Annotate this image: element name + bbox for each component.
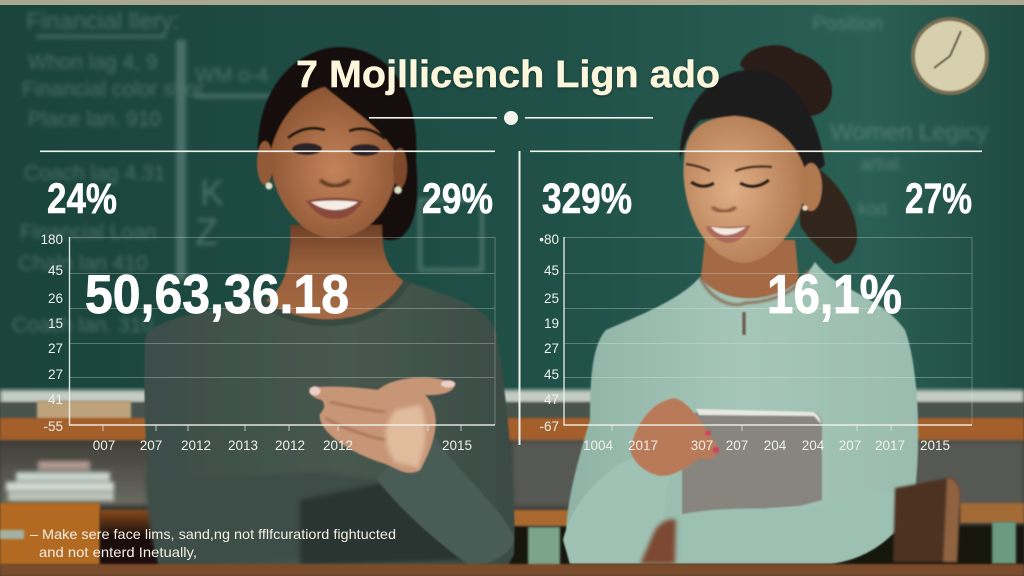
x axis labels left: 007: [93, 438, 115, 453]
blurred chalk writing: K: [200, 172, 224, 213]
ponytail: [800, 160, 857, 264]
big value left: 50,63,36.18: [85, 263, 349, 325]
nose: [712, 207, 736, 212]
x axis labels right: [583, 438, 950, 453]
ear left: [257, 141, 273, 185]
wall clock: [911, 17, 989, 95]
smile: [306, 198, 363, 219]
face: [683, 116, 806, 263]
top wall strip: [0, 0, 1024, 5]
footnote: – Make sere face lims, sand,ng not fflfcuratiord fightucted: [30, 526, 396, 542]
ledge shadow: [0, 403, 1024, 419]
y axis labels left: -55: [43, 419, 63, 434]
lower sleeve: [675, 491, 915, 564]
stat: 29%: 29%: [422, 175, 493, 223]
books far right: [992, 522, 1016, 564]
nose: [320, 180, 350, 186]
sleeve: [376, 430, 514, 566]
footnote: and not enterd Inetually,: [39, 544, 197, 560]
smile: [705, 225, 751, 243]
orange cabinet: [0, 503, 100, 565]
title: 7 Mojllicench Lign ado: [296, 54, 720, 96]
sweater: [566, 262, 918, 564]
blurred chalk writing: Financial Loan: [20, 221, 157, 244]
lower hand: [640, 519, 676, 564]
dark cabinet: [100, 510, 160, 566]
x axis labels left: 2013: [228, 438, 258, 453]
stat: 27%: 27%: [905, 175, 972, 223]
y axis labels right: -67: [539, 419, 559, 434]
blurred chalk writing: [12, 8, 988, 337]
eye left: [292, 143, 322, 155]
blurred chalk writing: Chaln lan 410: [18, 252, 148, 275]
blurred chalk writing: Coach lag 4.31: [24, 162, 165, 185]
desk edge: [0, 564, 1024, 576]
hands: [310, 378, 455, 473]
right shelf: [510, 526, 1024, 566]
eye left: [691, 182, 714, 186]
earrings: [266, 182, 402, 194]
button placket: [742, 312, 746, 335]
wooden shelf: [0, 418, 1024, 441]
section rules: [40, 150, 982, 445]
x axis labels right: 204: [764, 438, 787, 453]
x axis labels right: 207: [726, 438, 748, 453]
x axis labels left: 207: [140, 438, 162, 453]
blurred chalk writing: Financial color shor: [22, 78, 204, 101]
hair: [680, 70, 825, 175]
y axis labels left: 27: [48, 367, 63, 382]
y axis labels left: 41: [48, 392, 63, 407]
y axis labels right: 45: [544, 367, 559, 382]
fingernails: [310, 380, 455, 396]
dark gap: [300, 480, 470, 566]
y axis labels left: 27: [48, 341, 63, 356]
x axis labels right: 207: [839, 438, 861, 453]
lower wall right: [512, 441, 1024, 507]
panel: right stats and chart: [539, 175, 972, 453]
ear right: [393, 148, 407, 188]
big value right: 16,1%: [767, 263, 902, 325]
x axis labels left: 2012: [181, 438, 211, 453]
blurred chalk writing: Financial llery:: [26, 8, 179, 35]
left person: [144, 47, 515, 568]
y axis labels right: [539, 232, 559, 434]
right person: [563, 45, 960, 564]
earring: [802, 206, 808, 210]
panel: left stats and chart: [40, 175, 495, 453]
hair bun: [740, 45, 832, 116]
stacked books: [6, 461, 114, 501]
x axis labels left: 2015: [442, 438, 472, 453]
blurred chalk writing: Position: [812, 13, 883, 35]
front arm: [145, 470, 395, 566]
tablet: [682, 409, 822, 514]
y axis labels right: 19: [544, 316, 559, 331]
y axis labels left: 26: [48, 291, 63, 306]
title divider: [369, 111, 653, 125]
y axis labels left: [40, 232, 63, 434]
y axis labels right: 25: [544, 291, 559, 306]
chalk tray: [0, 390, 1024, 403]
x axis labels left: 2012: [275, 438, 305, 453]
blurred chalk writing: Place lan. 910: [28, 108, 161, 131]
hair back: [258, 47, 417, 240]
neck: [262, 225, 408, 320]
hand: [630, 398, 717, 476]
line chart frame left: [70, 237, 495, 431]
tray block: [37, 401, 131, 420]
x axis labels right: 307: [691, 438, 713, 453]
forearm: [563, 453, 670, 564]
x axis labels left: [93, 438, 472, 453]
blurred chalk writing: artial.: [860, 154, 904, 174]
footnote: [30, 526, 396, 560]
y axis labels right: 45: [544, 263, 559, 278]
sweater: [144, 281, 515, 568]
x axis labels right: 2017: [875, 438, 905, 453]
neck: [700, 240, 800, 305]
fingernails: [705, 430, 720, 454]
blurred chalk writing: Whon lag 4, 9: [28, 51, 158, 74]
right shelf top: [510, 510, 570, 526]
line chart frame right: [564, 237, 972, 431]
books right: [528, 527, 560, 566]
blurred chalk writing: WM o-4: [195, 64, 269, 87]
x axis labels right: 2015: [920, 438, 950, 453]
blurred chalk writing: Coach lan. 310: [12, 314, 153, 337]
lower wall left: [0, 441, 512, 505]
stat: 329%: 329%: [542, 175, 632, 223]
x axis labels right: 2017: [628, 438, 658, 453]
chair: [893, 478, 960, 562]
collar: [262, 281, 407, 323]
brows: [686, 164, 772, 171]
y axis labels left: 45: [48, 263, 63, 278]
eye right: [740, 180, 769, 186]
y axis labels right: 47: [544, 392, 559, 407]
y axis labels left: 180: [40, 232, 63, 247]
face: [270, 87, 397, 238]
cabinet label: [0, 530, 24, 539]
stat: 24%: 24%: [47, 175, 117, 223]
chalkboard: [0, 4, 1024, 392]
eye right: [350, 144, 380, 156]
y axis labels right: 27: [544, 341, 559, 356]
wood right: [960, 503, 1024, 523]
y axis labels right: •80: [539, 232, 559, 247]
x axis labels right: 1004: [583, 438, 614, 453]
x axis labels left: 2012: [323, 438, 353, 453]
blurred chalk writing: Women Legicy: [830, 119, 988, 146]
blurred chalk writing: kod: [858, 199, 887, 219]
ear: [800, 163, 822, 211]
brows: [288, 128, 385, 139]
x axis labels right: 204: [802, 438, 825, 453]
y axis labels left: 15: [48, 316, 63, 331]
blurred chalk writing: Z: [195, 212, 218, 254]
neckline: [700, 270, 808, 305]
